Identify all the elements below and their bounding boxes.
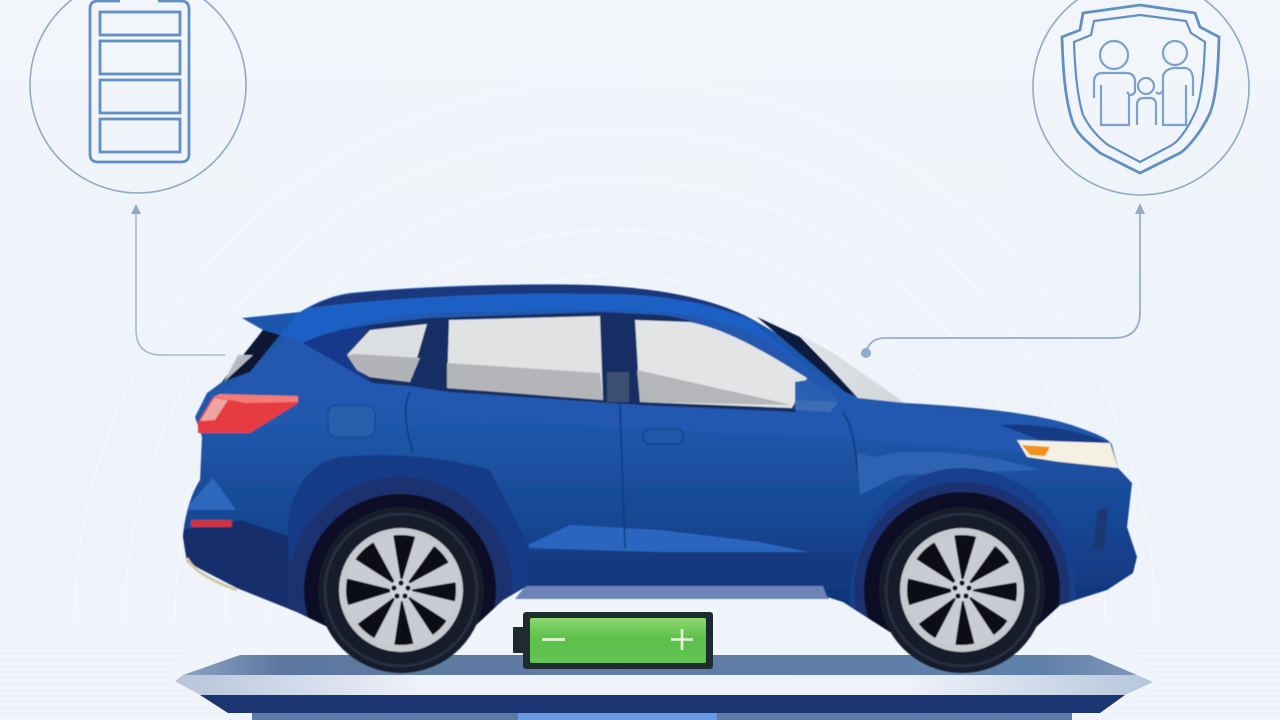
icon: family (1094, 41, 1193, 125)
car (180, 284, 1137, 703)
underbody strip (515, 584, 829, 599)
headlight (1017, 440, 1118, 468)
door handle (643, 429, 683, 444)
rocker highlight (528, 524, 808, 552)
door seams (406, 392, 857, 548)
side mirror (795, 380, 838, 412)
battery charge (530, 618, 706, 663)
circle (30, 0, 246, 193)
battery (513, 612, 713, 669)
icon: shield (1062, 5, 1219, 173)
battery case (523, 612, 713, 669)
rear wheel arch (288, 455, 528, 620)
hood shadow (1000, 425, 1112, 444)
car body (183, 284, 1137, 632)
body shading and highlights (182, 284, 1076, 632)
rear reflector (191, 520, 232, 527)
front window (635, 320, 807, 408)
fuel door (328, 405, 375, 437)
rear wheel (318, 507, 484, 673)
window surround (303, 312, 812, 412)
exhaust trim (187, 558, 237, 590)
minus sign (542, 638, 565, 641)
circle (1033, 0, 1249, 195)
windshield (757, 317, 905, 403)
left callout: battery icon in circle (30, 0, 246, 355)
pillar accent (607, 372, 629, 402)
front fog vent (1093, 508, 1108, 552)
rear lower bumper (182, 520, 289, 609)
battery terminal (513, 627, 525, 653)
middle window (447, 316, 603, 400)
right callout: family shield icon in circle (861, 0, 1249, 358)
front wheel arch (850, 468, 1075, 620)
plus sign (671, 629, 693, 650)
rear glass (222, 330, 280, 382)
taillight (198, 394, 298, 433)
icon: battery cells (90, 1, 189, 162)
front wheel (879, 507, 1045, 673)
platform (175, 655, 1153, 720)
rear quarter window (347, 324, 427, 382)
connector arrow with dot (861, 203, 1145, 358)
connector arrow (131, 204, 225, 355)
